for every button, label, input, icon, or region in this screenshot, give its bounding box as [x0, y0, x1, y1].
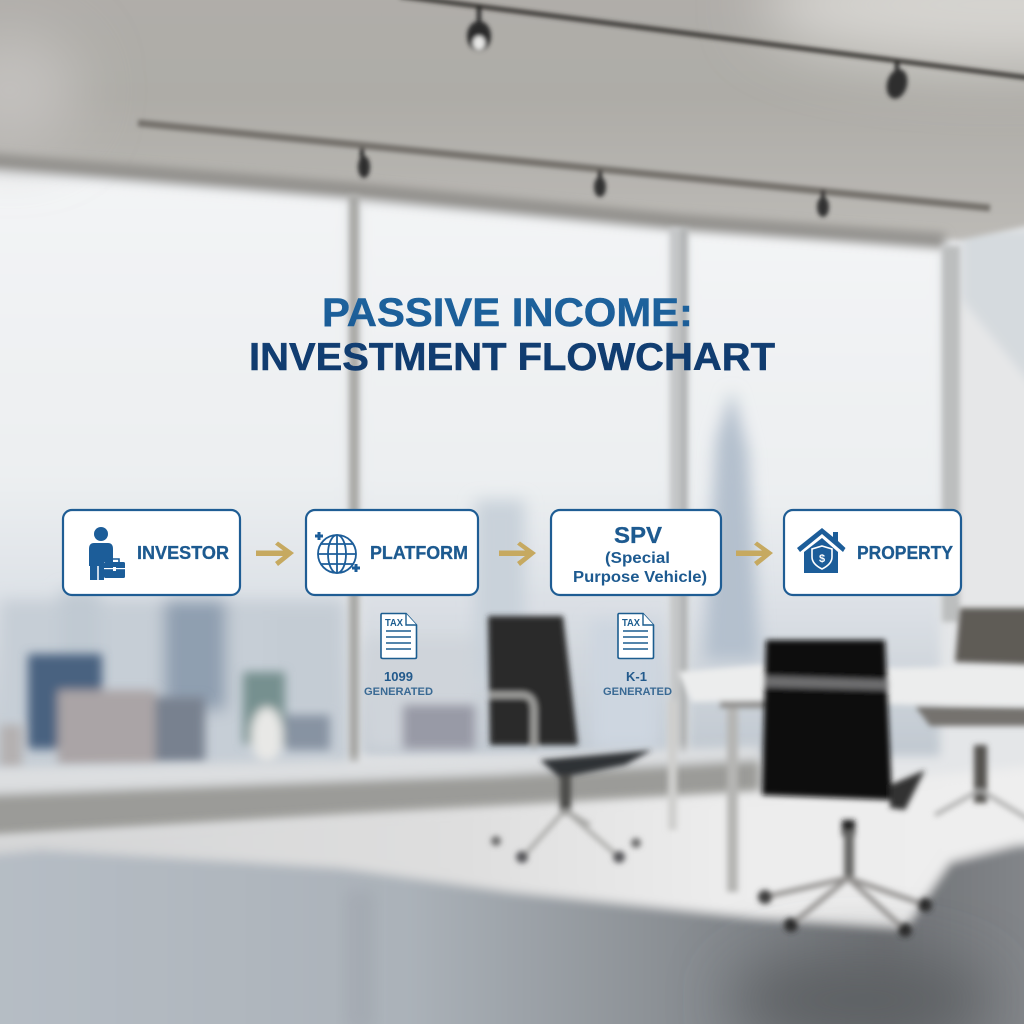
panel: platform	[306, 510, 478, 595]
window sill	[0, 746, 760, 838]
arrow: spv to property	[736, 542, 773, 566]
skyline	[0, 390, 760, 770]
tax form: 1099	[364, 614, 433, 698]
foreground chair	[758, 640, 932, 937]
label: generated: GENERATED	[603, 686, 672, 698]
arrow: investor to platform	[256, 542, 294, 566]
label: property: PROPERTY	[857, 543, 953, 563]
floor	[0, 765, 1024, 1024]
icon: globe	[315, 532, 360, 573]
windows	[0, 176, 940, 776]
mullions	[349, 195, 960, 765]
icon: tax document: TAX	[622, 618, 640, 629]
panel: spv	[551, 510, 721, 595]
label: purpose vehicle: Purpose Vehicle)	[573, 569, 707, 586]
label: investor: INVESTOR	[137, 543, 229, 563]
panel: property	[784, 510, 961, 595]
icon: investor with briefcase	[89, 527, 125, 580]
icon: house with shield: $	[819, 553, 825, 565]
tax form: k-1	[603, 614, 672, 698]
arrow: platform to spv	[499, 542, 536, 566]
middle chair	[488, 616, 652, 863]
label: k-1: K-1	[626, 669, 647, 684]
table	[668, 665, 1024, 892]
label: spv: SPV	[614, 522, 663, 548]
label: platform: PLATFORM	[370, 543, 468, 563]
ceiling	[0, 0, 1024, 241]
label: 1099: 1099	[384, 669, 413, 684]
right wall	[955, 225, 1024, 625]
far chair	[935, 608, 1024, 820]
ceiling tracks and lights	[138, 0, 1024, 217]
icon: house with shield	[797, 528, 846, 573]
icon: tax document: TAX	[385, 618, 403, 629]
title line 1: PASSIVE INCOME:	[322, 291, 693, 335]
label: generated: GENERATED	[364, 686, 433, 698]
label: special: (Special	[605, 550, 670, 567]
title line 2: INVESTMENT FLOWCHART	[249, 336, 775, 379]
panel: investor	[63, 510, 240, 595]
title	[249, 291, 775, 379]
